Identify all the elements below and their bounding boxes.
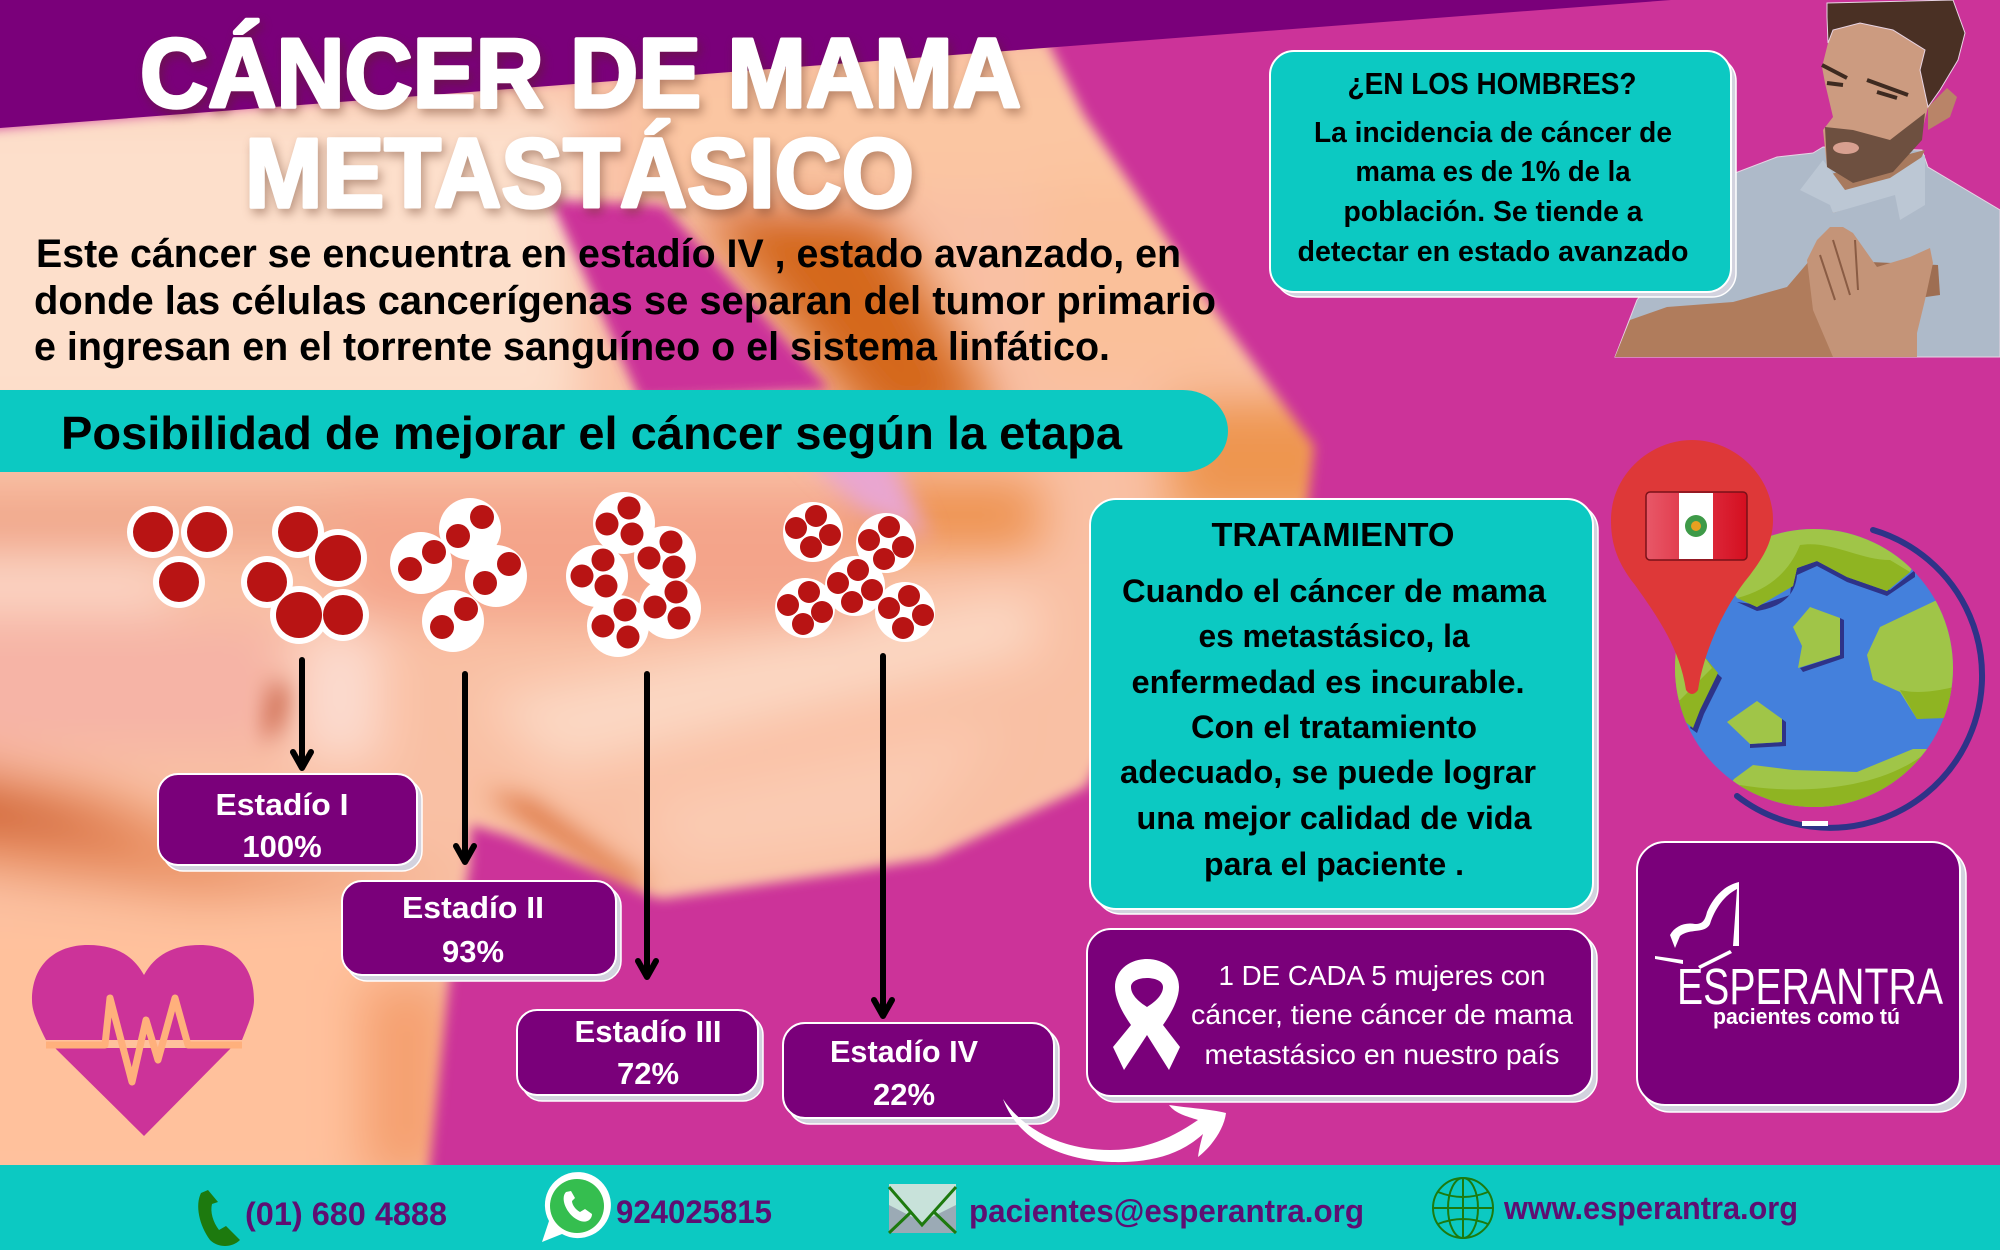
subtitle banner <box>0 390 1228 472</box>
icon: phone <box>198 1190 240 1246</box>
pale tail of gap <box>790 430 930 540</box>
dark crease <box>262 680 290 740</box>
arrow stage IV <box>874 656 892 1016</box>
intro text <box>34 232 1216 369</box>
arrow stage II <box>456 674 474 862</box>
cancer cells, stage III <box>390 498 527 652</box>
box: en los hombres: La incidencia de cáncer de <box>1314 117 1672 149</box>
box: Estadío I: Estadío I <box>216 787 348 822</box>
cancer cells, stage II <box>241 506 369 644</box>
box: en los hombres: detectar en estado avanzado <box>1298 236 1688 268</box>
south land <box>1732 749 1927 807</box>
icon: awareness ribbon <box>1113 959 1180 1070</box>
east land <box>1867 600 1953 719</box>
cancer cells, many <box>775 502 935 642</box>
box: tratamiento: una mejor calidad de vida <box>1136 800 1532 836</box>
cancer cells, stage I <box>127 506 233 608</box>
box: Estadío III <box>517 1010 763 1101</box>
arrow stage I <box>293 660 311 768</box>
box: tratamiento: es metastásico, la <box>1198 618 1470 654</box>
orange stripe <box>483 791 650 890</box>
box: Estadío I <box>158 774 422 871</box>
title: METASTÁSICO <box>245 118 914 228</box>
heart icon <box>32 945 254 1136</box>
box: 1 de cada 5 <box>1087 929 1597 1102</box>
subtitle banner: Posibilidad de mejorar el cáncer según la etapa <box>61 407 1122 459</box>
box: en los hombres <box>1270 51 1736 297</box>
box: tratamiento: adecuado, se puede lograr <box>1120 754 1536 790</box>
box: tratamiento: Con el tratamiento <box>1191 709 1477 745</box>
central island <box>1793 607 1840 668</box>
box: Estadío IV: 22% <box>873 1077 935 1112</box>
magenta gap in photo <box>551 200 830 400</box>
curved white arrow <box>1003 1099 1226 1162</box>
box: tratamiento <box>1090 499 1598 914</box>
box: logo: pacientes como tú <box>1713 1004 1900 1029</box>
title: CÁNCER DE MAMA <box>140 18 1021 128</box>
brows and eyes <box>1822 65 1908 98</box>
intro text: e ingresan en el torrente sanguíneo o el sistema linfático. <box>34 325 1110 369</box>
box: tratamiento: Cuando el cáncer de mama <box>1122 573 1546 609</box>
intro text: Este cáncer se encuentra en estadío IV , estado avanzado, en <box>36 232 1181 276</box>
west land <box>1675 653 1718 728</box>
cancer cells, stage IV <box>566 492 701 657</box>
email: pacientes@esperantra.org <box>969 1193 1364 1229</box>
north land shade <box>1737 544 1910 607</box>
ear <box>1928 88 1957 130</box>
box: 1 de cada 5: cáncer, tiene cáncer de mama <box>1191 999 1573 1030</box>
arm <box>1615 260 1835 357</box>
east land shade <box>1900 688 1952 719</box>
box: Estadío III: 72% <box>617 1056 679 1091</box>
finger lines <box>1820 240 1858 300</box>
flag <box>1646 492 1747 560</box>
map pin with flag of Peru <box>1611 440 1773 694</box>
title <box>140 18 1021 228</box>
footer bar <box>0 1165 2000 1250</box>
box: tratamiento: TRATAMIENTO <box>1212 516 1454 553</box>
front hand <box>1807 227 1933 357</box>
back hand <box>1870 262 1940 300</box>
box: en los hombres: mama es de 1% de la <box>1356 156 1631 188</box>
box: Estadío III: Estadío III <box>574 1014 722 1049</box>
collar <box>1800 155 1925 220</box>
box: 1 de cada 5: metastásico en nuestro país <box>1204 1039 1560 1070</box>
box: tratamiento: enfermedad es incurable. <box>1132 664 1524 700</box>
neck <box>1827 150 1925 213</box>
phone number: (01) 680 4888 <box>245 1196 447 1232</box>
website: www.esperantra.org <box>1503 1190 1798 1226</box>
blurred hands photo <box>0 47 1322 1165</box>
purple top wedge <box>0 0 1671 128</box>
intro text: donde las células cancerígenas se separan del tumor primario <box>34 279 1216 323</box>
south-west island <box>1727 701 1782 744</box>
box: Estadío IV: Estadío IV <box>830 1034 978 1069</box>
whatsapp number: 924025815 <box>616 1194 772 1230</box>
land shadows <box>1690 560 1915 748</box>
hair <box>1827 0 1965 107</box>
south land shade <box>1740 756 1922 807</box>
globe <box>1675 527 1986 831</box>
mouth <box>1833 142 1859 154</box>
box: Estadío II <box>342 881 621 981</box>
box: Estadío II: 93% <box>442 934 504 969</box>
box: tratamiento: para el paciente . <box>1204 846 1464 882</box>
logo butterfly <box>1655 882 1739 969</box>
box: en los hombres: ¿EN LOS HOMBRES? <box>1348 66 1636 101</box>
arrow stage III <box>638 674 656 977</box>
box: Estadío IV <box>783 1023 1059 1124</box>
face <box>1822 23 1928 183</box>
box: Estadío I: 100% <box>242 829 322 864</box>
icon: whatsapp <box>542 1172 611 1242</box>
box: logo <box>1637 842 1966 1112</box>
icon: mail <box>889 1184 956 1233</box>
icon: web globe <box>1433 1178 1493 1238</box>
orbit ring <box>1737 530 1982 828</box>
man photo <box>1615 0 2000 357</box>
box: en los hombres: población. Se tiende a <box>1344 196 1643 228</box>
north land <box>1735 529 1912 607</box>
beard <box>1825 113 1925 183</box>
box: 1 de cada 5: 1 DE CADA 5 mujeres con <box>1218 960 1546 991</box>
box: Estadío II: Estadío II <box>402 890 544 925</box>
shirt <box>1615 147 2000 357</box>
